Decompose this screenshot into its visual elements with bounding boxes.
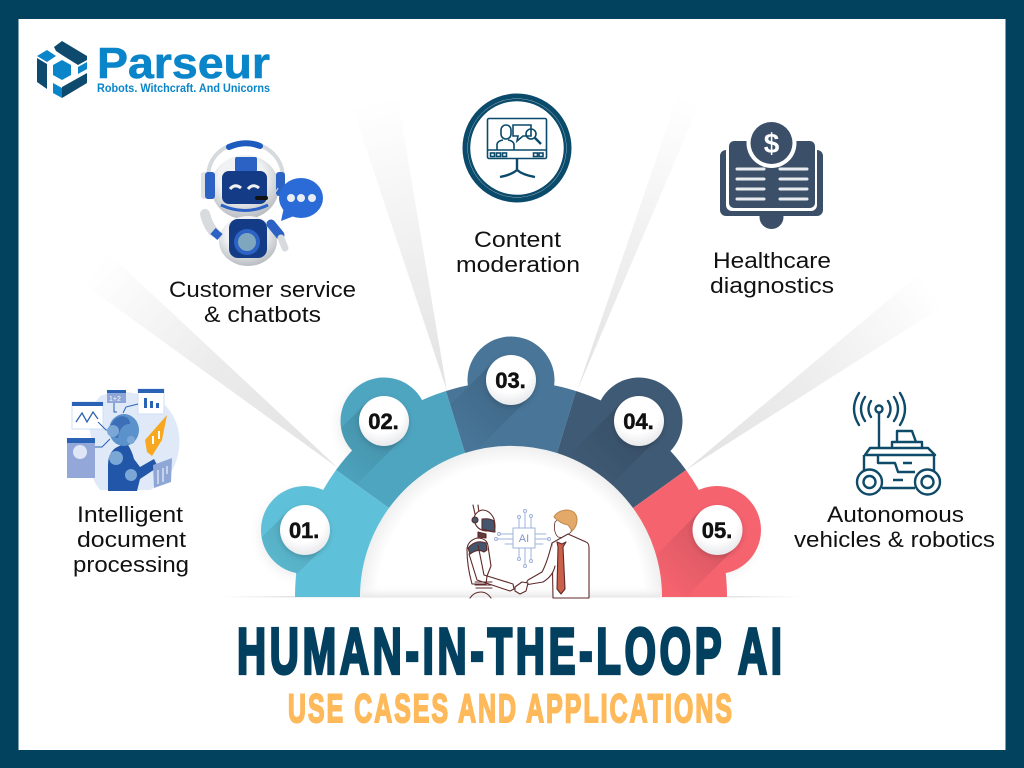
label: intelligent document processing: document — [77, 527, 186, 552]
label: autonomous vehicles: Autonomous — [827, 502, 964, 527]
icon: content moderation — [465, 96, 569, 200]
human — [515, 510, 589, 598]
logo wordmark: Parseur — [97, 39, 270, 88]
label: intelligent document processing: processing — [73, 552, 189, 577]
baseline shadow — [222, 596, 802, 598]
title: HUMAN-IN-THE-LOOP AI — [237, 616, 782, 688]
label: intelligent document processing — [73, 502, 189, 577]
segment 05: 05. — [702, 518, 732, 543]
AI chip — [494, 510, 550, 568]
label: customer service — [169, 277, 356, 327]
logo: Parseur — [37, 39, 270, 98]
label: content moderation: Content — [474, 227, 561, 252]
icon: intelligent document processing: 1+2 — [109, 396, 121, 403]
robot — [467, 505, 514, 598]
segment 04: 04. — [623, 409, 654, 434]
label: content moderation — [456, 227, 580, 277]
icon: customer service robot — [201, 143, 323, 266]
segment 01: 01. — [289, 518, 319, 543]
segment 02: 02. — [368, 409, 399, 434]
segment 01 — [261, 470, 389, 597]
logo mark — [37, 41, 87, 98]
label: healthcare diagnostics: Healthcare — [713, 248, 831, 273]
inner floor shade — [362, 585, 660, 597]
icon: autonomous rover — [854, 393, 940, 494]
icon: healthcare book: $ — [764, 128, 780, 159]
label: healthcare diagnostics: diagnostics — [710, 273, 834, 298]
icon: healthcare book — [720, 118, 823, 229]
subtitle: USE CASES AND APPLICATIONS — [288, 687, 732, 732]
segment 03 — [443, 336, 576, 453]
segment 05 — [633, 470, 761, 598]
label: healthcare diagnostics — [710, 248, 834, 298]
label: autonomous vehicles — [794, 502, 995, 552]
semicircular inner area — [360, 446, 662, 597]
logo tagline: Robots. Witchcraft. And Unicorns — [97, 83, 270, 95]
illustration: robot and human handshake — [467, 505, 589, 598]
radial light rays — [85, 98, 945, 470]
segment 02 — [336, 378, 465, 508]
label: autonomous vehicles: vehicles & robotics — [794, 527, 995, 552]
label: content moderation: moderation — [456, 252, 580, 277]
label: customer service: Customer service — [169, 277, 356, 302]
label: intelligent document processing: Intelligent — [77, 502, 183, 527]
blob soft shadows — [260, 383, 757, 577]
AI chip text: AI — [519, 533, 529, 545]
icon: intelligent document processing — [67, 389, 179, 491]
segment 04 — [557, 378, 686, 508]
label: customer service: & chatbots — [204, 302, 321, 327]
segment 03: 03. — [495, 368, 526, 393]
